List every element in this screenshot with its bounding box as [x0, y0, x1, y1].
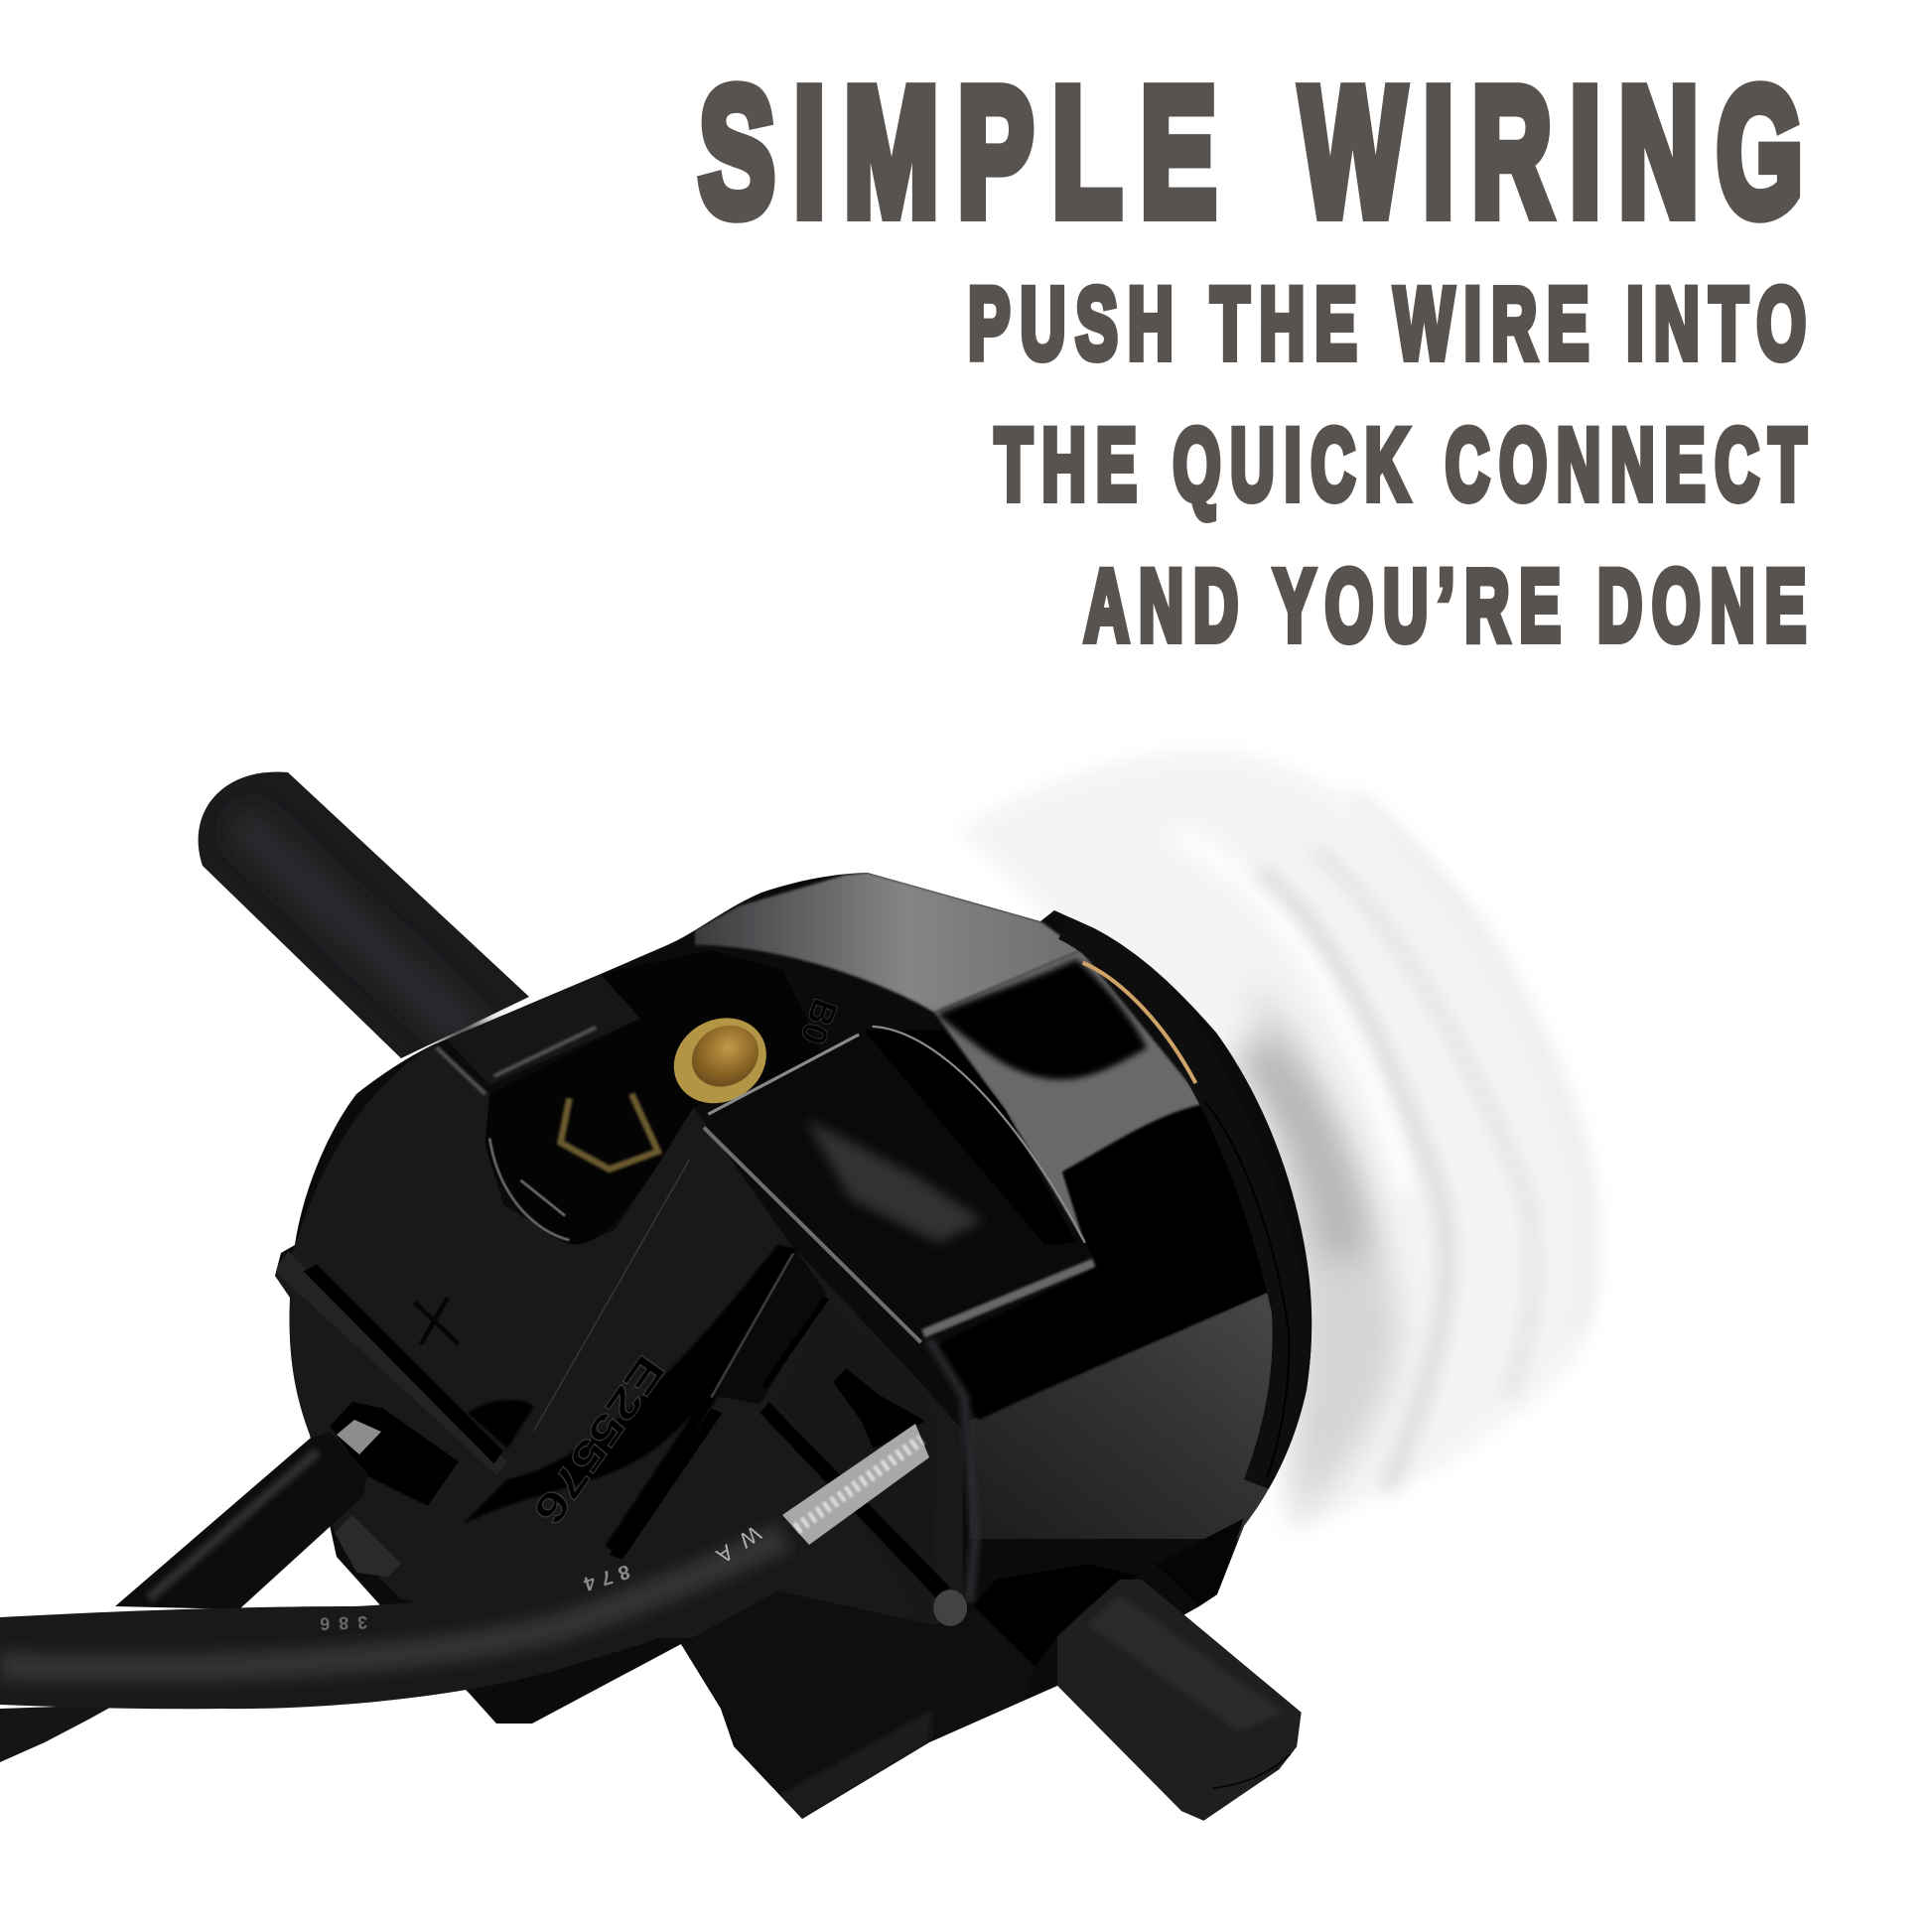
terminal panel [825, 1303, 826, 1305]
lower pin [1057, 1580, 1302, 1821]
collar ring [1067, 921, 1292, 1486]
cavity upper wall [446, 974, 640, 1085]
terminal slots [610, 1402, 950, 1599]
slot end stud [933, 1589, 967, 1626]
brass eyelet [673, 1018, 766, 1104]
pin shadow [973, 1565, 1138, 1667]
third wire [0, 1705, 115, 1762]
face surface [275, 1045, 963, 1638]
cavity gloss [489, 1138, 570, 1240]
top shoulder [695, 873, 1080, 1013]
upper pin [199, 771, 529, 1058]
black reflection lower [930, 1103, 1278, 1420]
lip ridge [275, 1251, 507, 1475]
subtitle text block [968, 267, 1816, 662]
brass contact strip [1083, 963, 1195, 1083]
cavity [485, 950, 826, 1245]
plus mark [414, 1298, 459, 1344]
front wire: W A [709, 1521, 765, 1571]
front wire [0, 1503, 805, 1709]
title: SIMPLE [699, 50, 1235, 253]
collar end [1201, 1519, 1243, 1604]
back wire cavity [330, 1402, 459, 1506]
socket body silhouette [275, 873, 1311, 1819]
moulded mark B0: B0 [792, 994, 845, 1049]
back wire [115, 1420, 381, 1609]
frosted bulb base [960, 750, 1599, 1530]
front face plate [275, 950, 963, 1638]
black reflection upper [936, 959, 1147, 1079]
lower side face [970, 1287, 1291, 1539]
moulded part number: E25576 [524, 1347, 674, 1533]
gloss ridge [929, 1340, 976, 1602]
inner brass terminal [561, 1094, 658, 1170]
moulded ribs [711, 1249, 826, 1404]
mid gloss [934, 950, 1213, 1243]
face reflections [468, 1400, 534, 1449]
terminal hole [833, 1369, 924, 1449]
raised key block [704, 1027, 1096, 1342]
lower body [681, 1340, 1244, 1819]
lower face [681, 1590, 1035, 1819]
product photo: lamp socket with wires [0, 750, 1599, 1821]
stripped conductor [782, 1424, 929, 1545]
wire print marks: 874 [575, 1560, 632, 1596]
socket surfaces [275, 873, 1292, 1819]
shoulder and side of body [695, 873, 1292, 1539]
front wire: 386 [311, 1612, 368, 1634]
